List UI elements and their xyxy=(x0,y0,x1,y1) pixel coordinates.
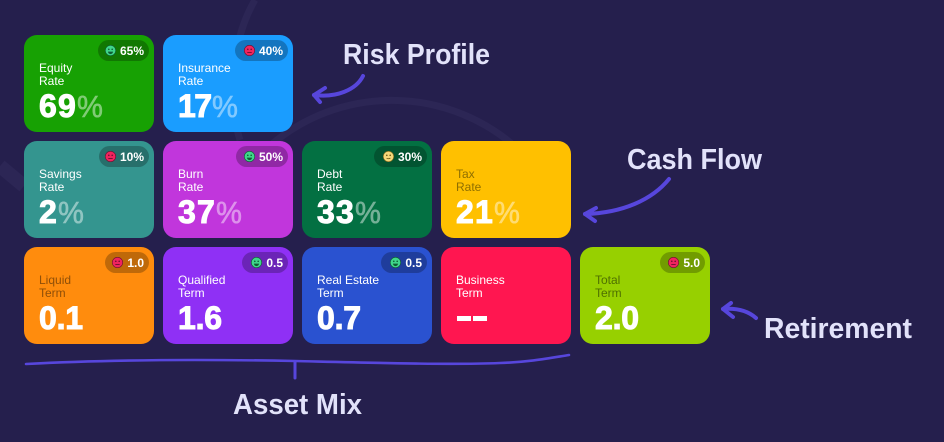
value: 33%: % xyxy=(355,195,381,230)
value: 33% xyxy=(317,194,381,230)
badge: 65%: 65% xyxy=(120,44,144,58)
value: 2.0: 2.0 xyxy=(595,300,639,336)
value: 0.1: 0.1 xyxy=(39,300,83,336)
label: Total Term: Term xyxy=(595,286,622,300)
value: 37%: 37 xyxy=(178,194,216,230)
card: Real Estate Term xyxy=(302,247,432,344)
label: Debt Rate: Debt xyxy=(317,167,342,181)
label: Real Estate Term: Real Estate xyxy=(317,273,379,287)
value: 2%: % xyxy=(58,195,84,230)
badge: 40% xyxy=(235,40,288,61)
label: Savings Rate: Savings xyxy=(39,167,82,181)
value: 0.7: 0.7 xyxy=(317,300,361,336)
label: Qualified Term xyxy=(178,273,225,300)
card: Total Term xyxy=(580,247,710,344)
label: Real Estate Term: Term xyxy=(317,286,344,300)
value: 2% xyxy=(39,194,84,230)
label: Savings Rate xyxy=(39,167,82,194)
label: Tax Rate xyxy=(456,167,481,194)
label: Debt Rate: Rate xyxy=(317,180,342,194)
value: 37% xyxy=(178,194,242,230)
icon: happy face xyxy=(105,45,116,56)
badge: 0.5: 0.5 xyxy=(405,256,422,270)
label: Business Term xyxy=(456,273,505,300)
value: 69%: 69 xyxy=(39,88,77,124)
value: 2%: 2 xyxy=(39,194,58,230)
icon: sad face xyxy=(244,45,255,56)
label: Liquid Term xyxy=(39,273,71,300)
value: 21% xyxy=(456,194,520,230)
label: Liquid Term: Liquid xyxy=(39,273,71,287)
badge: 50% xyxy=(236,146,288,167)
value: 69% xyxy=(39,88,103,124)
label: Total Term: Total xyxy=(595,273,620,287)
label: Qualified Term: Term xyxy=(178,286,205,300)
label: Liquid Term: Term xyxy=(39,286,66,300)
label: Business Term: Business xyxy=(456,273,505,287)
label: Equity Rate: Rate xyxy=(39,74,64,88)
badge: 10%: 10% xyxy=(120,150,144,164)
card: Debt Rate xyxy=(302,141,432,238)
card: Qualified Term xyxy=(163,247,293,344)
label: Equity Rate xyxy=(39,61,72,88)
heading: Risk Profile: Risk Profile xyxy=(343,39,490,71)
label: Burn Rate xyxy=(178,167,203,194)
card: Business Term xyxy=(441,247,571,344)
arrow: Retirement xyxy=(723,303,756,318)
label: Savings Rate: Rate xyxy=(39,180,64,194)
badge: 50%: 50% xyxy=(259,150,283,164)
badge: 30%: 30% xyxy=(398,150,422,164)
badge: 0.5 xyxy=(242,252,288,273)
badge: 5.0 xyxy=(660,252,705,273)
icon: sad face xyxy=(105,151,116,162)
label: Real Estate Term xyxy=(317,273,379,300)
value: no data xyxy=(457,316,487,321)
icon: sad face xyxy=(112,257,123,268)
label: Tax Rate: Tax xyxy=(456,167,475,181)
label: Business Term: Term xyxy=(456,286,483,300)
value: 17%: 17 xyxy=(178,88,211,124)
card: Liquid Term xyxy=(24,247,154,344)
label: Equity Rate: Equity xyxy=(39,61,72,75)
value: 69%: % xyxy=(77,89,103,124)
label: Debt Rate xyxy=(317,167,342,194)
badge: 65% xyxy=(98,40,149,61)
badge: 10% xyxy=(99,146,149,167)
label: Insurance Rate: Insurance xyxy=(178,61,231,75)
card: Savings Rate xyxy=(24,141,154,238)
arrow: Risk Profile xyxy=(314,76,363,102)
label: Insurance Rate xyxy=(178,61,231,88)
value: 17% xyxy=(178,88,238,124)
icon: happy face xyxy=(390,257,401,268)
badge: 1.0: 1.0 xyxy=(127,256,144,270)
value: 37%: % xyxy=(216,195,242,230)
label: Burn Rate: Burn xyxy=(178,167,203,181)
value: 21%: 21 xyxy=(456,194,494,230)
badge: 40%: 40% xyxy=(259,44,283,58)
label: Insurance Rate: Rate xyxy=(178,74,203,88)
value: 33%: 33 xyxy=(317,194,355,230)
icon: sad face xyxy=(668,257,679,268)
heading: Cash Flow: Cash Flow xyxy=(627,144,762,176)
label: Qualified Term: Qualified xyxy=(178,273,225,287)
value: 1.6: 1.6 xyxy=(178,300,222,336)
icon: neutral face xyxy=(383,151,394,162)
label: Tax Rate: Rate xyxy=(456,180,481,194)
badge: 0.5 xyxy=(381,252,427,273)
value: 21%: % xyxy=(494,195,520,230)
value: 17%: % xyxy=(212,89,238,124)
label: Total Term xyxy=(595,273,622,300)
arrow: Cash Flow xyxy=(585,179,669,221)
badge: 30% xyxy=(374,146,427,167)
heading: Asset Mix: Asset Mix xyxy=(233,389,362,421)
card: Burn Rate xyxy=(163,141,293,238)
card: Tax Rate xyxy=(441,141,571,238)
icon: happy face xyxy=(244,151,255,162)
heading: Retirement: Retirement xyxy=(764,313,912,345)
label: Burn Rate: Rate xyxy=(178,180,203,194)
badge: 5.0: 5.0 xyxy=(683,256,700,270)
brace: Asset Mix xyxy=(26,355,569,378)
card: Equity Rate xyxy=(24,35,154,132)
badge: 1.0 xyxy=(105,252,149,273)
card: Insurance Rate xyxy=(163,35,293,132)
badge: 0.5: 0.5 xyxy=(266,256,283,270)
icon: happy face xyxy=(251,257,262,268)
